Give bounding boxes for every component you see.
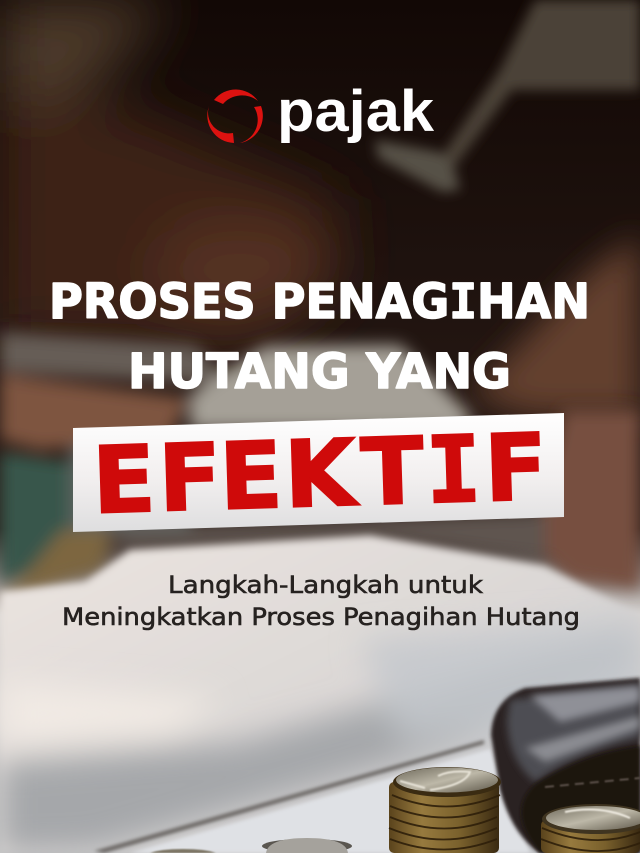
logo wordmark: pajak [277, 79, 435, 144]
highlighted banner: EFEKTIF: F [483, 414, 549, 523]
logo [207, 79, 435, 144]
title: HUTANG YANG [128, 344, 511, 400]
subtitle [62, 571, 580, 631]
highlighted banner: EFEKTIF: I [424, 416, 483, 525]
title: PROSES PENAGIHAN [49, 274, 590, 330]
subtitle: Langkah-Langkah untuk [168, 571, 483, 599]
coin stack: far left [150, 849, 216, 853]
highlighted banner: EFEKTIF: EFEKT [91, 418, 425, 535]
highlighted banner: EFEKTIF [73, 413, 564, 535]
coin stack: right [541, 804, 640, 853]
title [49, 274, 590, 400]
subtitle: Meningkatkan Proses Penagihan Hutang [62, 603, 580, 631]
coin stack: tall centre [389, 767, 501, 853]
photo: coin stacks [150, 767, 640, 853]
logo icon: red ring [207, 89, 263, 143]
photo: leather wallet [491, 678, 640, 853]
coin stack: small silver [262, 838, 352, 853]
